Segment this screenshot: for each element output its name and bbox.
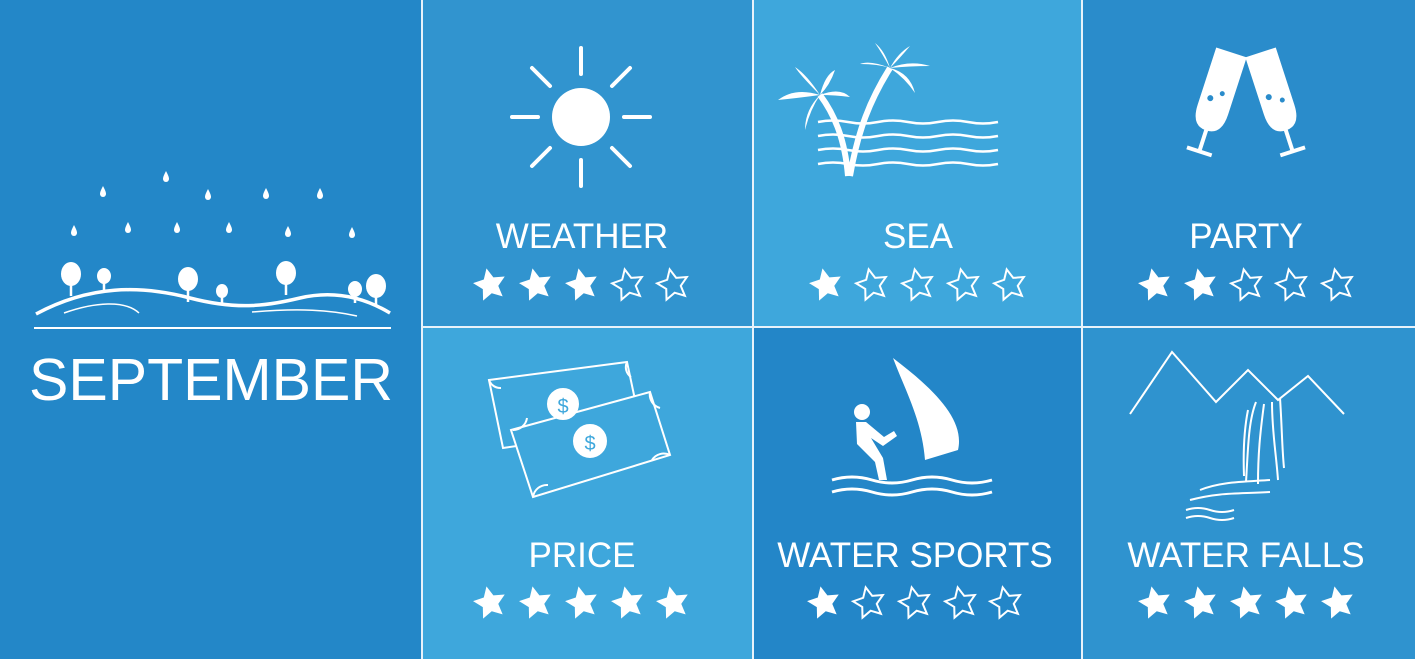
icon: champagne glasses [1183, 48, 1309, 158]
panel: background left [0, 0, 422, 659]
icon: sun [512, 48, 650, 186]
icon: palm sea [778, 43, 998, 176]
rating: weather 3 [471, 265, 691, 302]
icon: money [489, 362, 670, 497]
heading: SEPTEMBER: SEPTEMBER [29, 347, 393, 413]
title: WEATHER: WEATHER [496, 217, 668, 256]
title: SEA: SEA [883, 217, 954, 256]
icon: money: $ [557, 396, 569, 418]
icon: waterfall [1130, 352, 1344, 520]
rating: water sports 1 [805, 583, 1024, 620]
icon: money: $ [584, 433, 596, 455]
rating: sea 1 [807, 265, 1028, 302]
title: PARTY: PARTY [1189, 217, 1303, 256]
icon: rainy landscape [34, 171, 391, 328]
rating: water falls 5 [1136, 583, 1357, 620]
icon: windsurfer [832, 358, 992, 495]
panel: cells [423, 0, 1415, 659]
rating: party 2 [1136, 265, 1356, 302]
title: WATER SPORTS: WATER SPORTS [777, 536, 1053, 575]
rating: price 5 [471, 583, 692, 620]
title: WATER FALLS: WATER FALLS [1127, 536, 1365, 575]
title: PRICE: PRICE [529, 536, 635, 575]
